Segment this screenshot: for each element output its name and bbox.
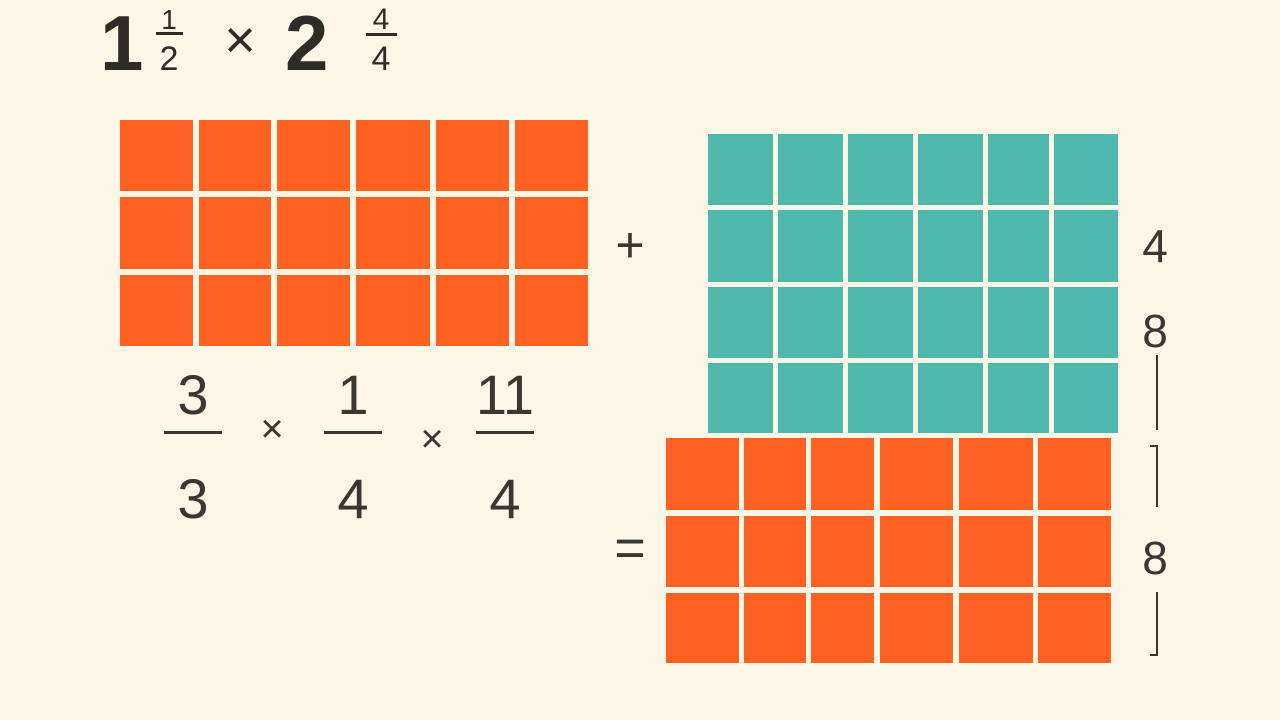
right labels: 4: [1142, 220, 1168, 272]
fraction expression: 4: [489, 467, 521, 530]
fraction expression: 3: [177, 363, 209, 426]
fraction expression: 3: [177, 467, 209, 530]
title: [100, 0, 397, 87]
fraction expression: 11: [476, 363, 534, 426]
fraction expression: ×: [420, 417, 444, 461]
title: 1: [100, 0, 143, 87]
title: ×: [224, 10, 256, 70]
plus sign: +: [615, 217, 645, 273]
fraction expression: 1: [337, 363, 369, 426]
orange grid top-left: [120, 120, 588, 346]
teal grid: [708, 134, 1118, 433]
right labels: 8: [1142, 532, 1168, 584]
right labels: [1142, 220, 1168, 656]
right labels: 8: [1142, 305, 1168, 357]
title: 4: [372, 40, 390, 78]
fraction expression: 4: [337, 467, 369, 530]
fraction expression: ×: [260, 407, 284, 451]
title: 1: [161, 4, 177, 35]
title: 2: [160, 40, 178, 78]
fraction expression: [164, 363, 534, 530]
equals sign: =: [614, 518, 646, 578]
title: 4: [373, 3, 389, 36]
title: 2: [285, 0, 328, 87]
orange grid bottom-right: [666, 438, 1111, 663]
